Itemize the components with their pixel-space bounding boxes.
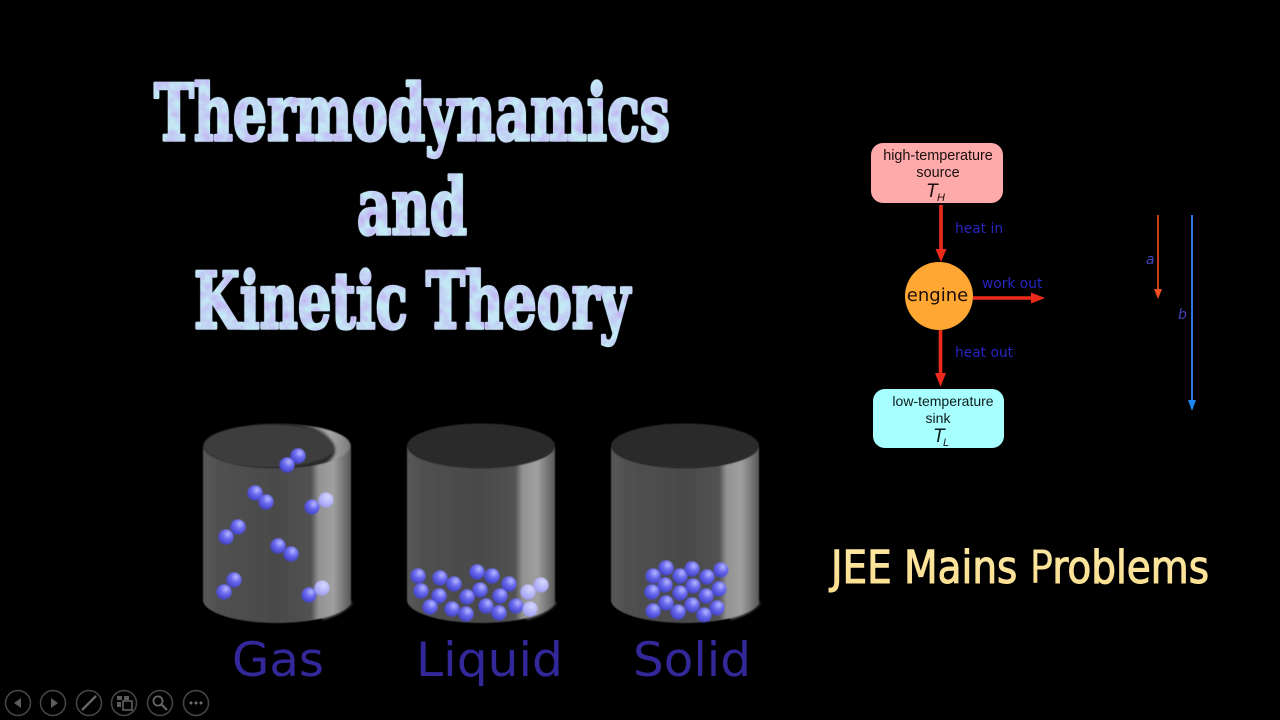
lid tint bbox=[204, 425, 336, 467]
title: and bbox=[357, 162, 467, 253]
source box bbox=[871, 143, 1003, 204]
cylinder: liquid bbox=[407, 424, 555, 623]
more button bbox=[184, 690, 208, 716]
engine: engine bbox=[907, 285, 968, 306]
next button bbox=[40, 690, 66, 716]
source box: H bbox=[937, 192, 945, 204]
cylinder: gas bbox=[203, 424, 351, 623]
arrow: work out bbox=[973, 292, 1045, 304]
label b: b bbox=[1178, 307, 1187, 323]
label: heat in: heat in bbox=[955, 221, 1003, 237]
source box: source bbox=[916, 165, 960, 181]
gas particles bbox=[216, 448, 334, 602]
subtitle: JEE Mains Problems bbox=[828, 541, 1209, 594]
arrow: heat out bbox=[935, 330, 946, 387]
title: Thermodynamics bbox=[154, 68, 670, 159]
sink box bbox=[873, 389, 1004, 449]
heat engine diagram bbox=[871, 143, 1045, 449]
state labels: Liquid bbox=[416, 633, 563, 688]
liquid particles bbox=[410, 564, 548, 622]
zoom button bbox=[148, 690, 172, 716]
sink box: L bbox=[943, 437, 949, 449]
cylinder: solid bbox=[611, 424, 759, 623]
state labels bbox=[232, 633, 751, 688]
label a: a bbox=[1146, 252, 1155, 268]
source box: T bbox=[926, 181, 939, 202]
previous button bbox=[6, 690, 30, 716]
pen button bbox=[76, 690, 102, 716]
title bbox=[154, 68, 670, 347]
engine bbox=[905, 262, 973, 330]
label: heat out: heat out bbox=[955, 345, 1014, 361]
slideshow controls bbox=[6, 690, 208, 716]
sink box: T bbox=[933, 426, 946, 447]
sink box: low-temperature bbox=[892, 393, 994, 409]
title: and bbox=[357, 162, 467, 253]
source box: high-temperature bbox=[883, 148, 993, 164]
state labels: Gas bbox=[232, 633, 324, 688]
title: Kinetic Theory bbox=[194, 256, 632, 347]
solid particles bbox=[644, 560, 728, 622]
vector arrows a and b bbox=[1146, 215, 1196, 411]
arrow b bbox=[1188, 215, 1196, 411]
highlight crescent on gas lid bbox=[300, 424, 352, 462]
arrow: heat in bbox=[936, 205, 946, 262]
state labels: Solid bbox=[633, 633, 751, 688]
title: Kinetic Theory bbox=[194, 256, 632, 347]
slides button bbox=[112, 690, 136, 716]
arrow a bbox=[1154, 215, 1162, 299]
title: Thermodynamics bbox=[154, 68, 670, 159]
label: work out: work out bbox=[982, 276, 1043, 292]
sink box: sink bbox=[926, 410, 951, 426]
